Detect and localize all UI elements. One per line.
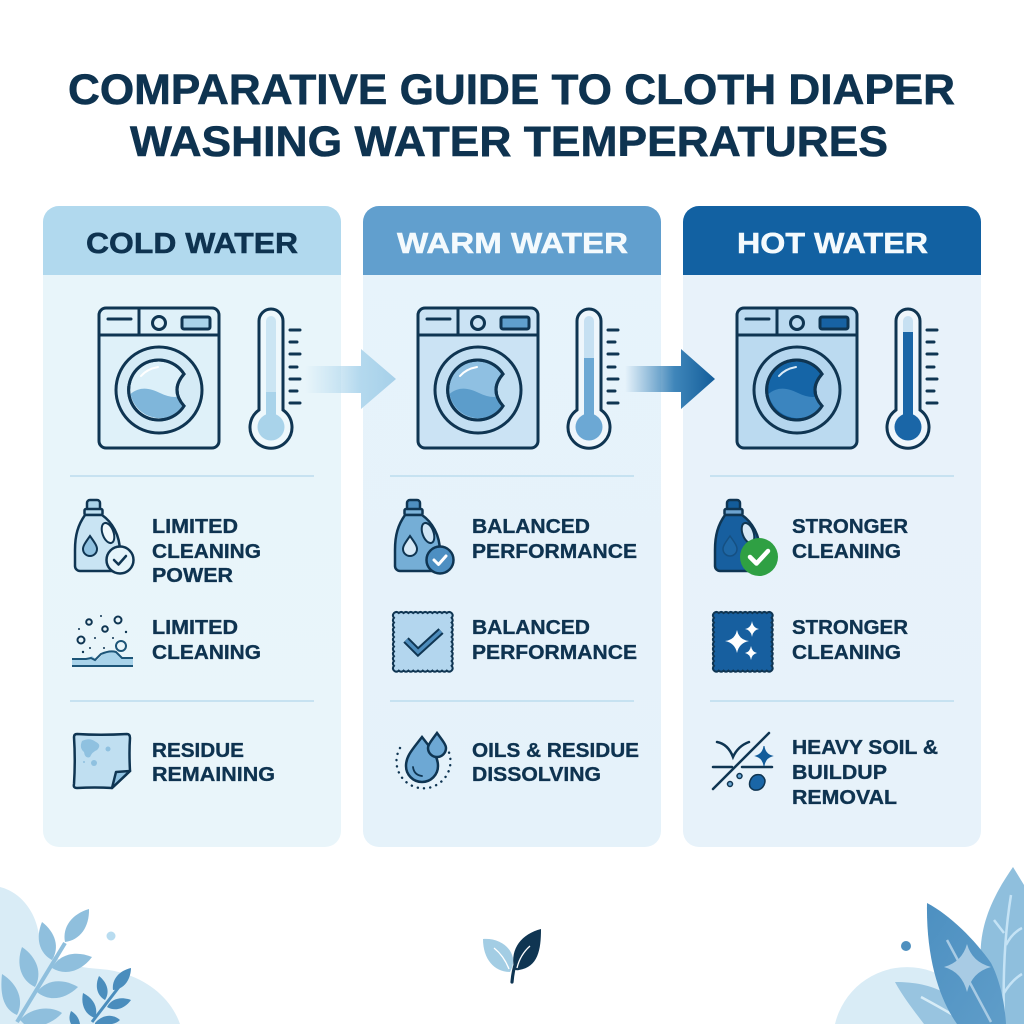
row: residue remaining: REMAINING [152, 763, 275, 786]
icon: warm washing machine [418, 308, 538, 448]
row: heavy soil and buildup removal: HEAVY SOIL & [792, 736, 938, 759]
row: limited cleaning power: CLEANING [152, 540, 261, 563]
icon: cold washing machine [99, 308, 219, 448]
icon: cold thermometer [250, 309, 300, 448]
title [68, 66, 955, 166]
row: limited cleaning power: POWER [152, 564, 233, 587]
row: limited cleaning power [75, 500, 261, 587]
cold water header [43, 206, 341, 275]
row: balanced performance (fabric): PERFORMANCE [472, 641, 637, 664]
icon: hot washing machine [737, 308, 857, 448]
icon: fabric swatch with sparkles [713, 612, 773, 672]
icon: water drops [396, 733, 450, 788]
row: limited cleaning: LIMITED [152, 616, 238, 639]
title: WASHING WATER TEMPERATURES [130, 118, 888, 166]
icon: fabric swatch with check [393, 612, 453, 672]
icon: detergent bottle with check [395, 500, 454, 574]
row: balanced performance (fabric) [393, 612, 637, 672]
row: limited cleaning: CLEANING [152, 641, 261, 664]
row: stronger cleaning (fabric): CLEANING [792, 641, 901, 664]
hot water header: HOT WATER [737, 228, 928, 260]
row: balanced performance: PERFORMANCE [472, 540, 637, 563]
row: stronger cleaning (fabric) [713, 612, 908, 672]
icon: centre leaf logo [483, 929, 541, 982]
row: stronger cleaning: CLEANING [792, 540, 901, 563]
row: residue remaining: RESIDUE [152, 739, 244, 762]
icon: soil slash [713, 733, 772, 790]
warm water header: WARM WATER [397, 228, 628, 260]
decoration: bottom right foliage [835, 867, 1024, 1024]
row: stronger cleaning [715, 500, 908, 576]
row: balanced performance (fabric): BALANCED [472, 616, 590, 639]
row: limited cleaning power: LIMITED [152, 515, 238, 538]
cold water header: COLD WATER [86, 228, 298, 260]
icon: warm thermometer [568, 309, 618, 448]
arrow: cold to warm [305, 349, 396, 409]
row: balanced performance: BALANCED [472, 515, 590, 538]
row: balanced performance [395, 500, 637, 574]
icon: hot thermometer [887, 309, 937, 448]
panel: hot water [683, 206, 981, 847]
row: stronger cleaning: STRONGER [792, 515, 908, 538]
row: oils and residue dissolving: OILS & RESIDUE [472, 739, 639, 762]
warm water header [363, 206, 661, 275]
title: COMPARATIVE GUIDE TO CLOTH DIAPER [68, 66, 955, 114]
row: residue remaining [74, 734, 275, 788]
icon: cloth with residue [74, 734, 130, 788]
icon: bubbles and soil [72, 615, 133, 666]
icon: detergent bottle with check [75, 500, 134, 574]
panel: cold water [43, 206, 341, 847]
row: heavy soil and buildup removal [713, 733, 938, 809]
row: stronger cleaning (fabric): STRONGER [792, 616, 908, 639]
row: limited cleaning [72, 615, 261, 666]
row: oils and residue dissolving: DISSOLVING [472, 763, 601, 786]
row: heavy soil and buildup removal: BUILDUP [792, 761, 887, 784]
arrow: warm to hot [625, 349, 715, 409]
icon: detergent bottle with green check [715, 500, 778, 576]
decoration: bottom left foliage [0, 887, 180, 1024]
panel: warm water [363, 206, 661, 847]
row: heavy soil and buildup removal: REMOVAL [792, 786, 897, 809]
hot water header [683, 206, 981, 275]
row: oils and residue dissolving [396, 733, 639, 788]
